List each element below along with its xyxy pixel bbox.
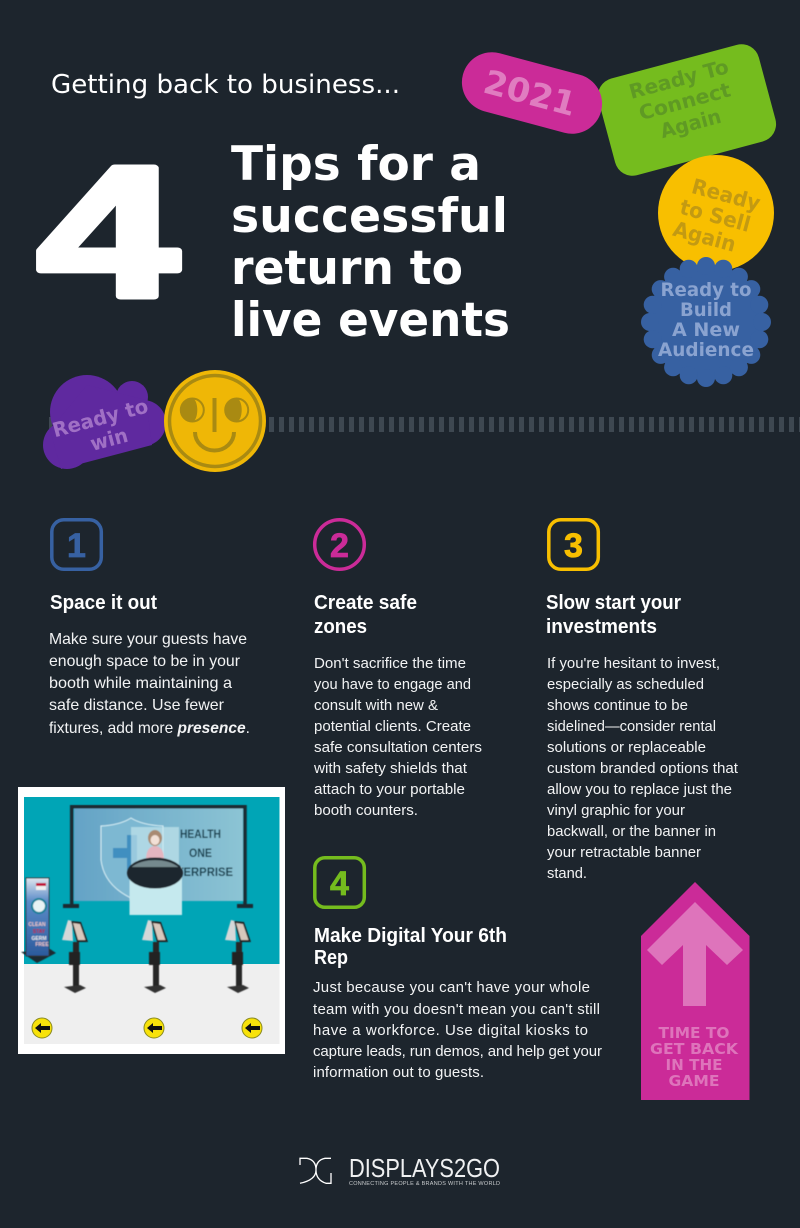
backwall banner: ONE	[189, 846, 212, 860]
body: tip 2: with safety shields that	[313, 760, 468, 777]
icon: smiley coin	[164, 370, 266, 472]
body: tip 4	[313, 979, 602, 1081]
icon: number 1	[52, 520, 101, 569]
body: tip 3: shows continue to be	[547, 697, 688, 714]
tip 1: Space it out	[49, 520, 250, 737]
retractable tower banner: CLEAN	[28, 922, 46, 928]
badge: Ready to Sell Again: Ready	[689, 174, 763, 216]
body: tip 2: booth counters.	[314, 802, 418, 819]
heading: Create safe zones	[314, 592, 417, 638]
badge: Ready To Connect Again: Connect	[636, 77, 734, 125]
badge: Ready to Build A New Audience: A New	[672, 319, 740, 341]
kiosk 3	[225, 920, 251, 993]
retractable tower banner: STAY	[33, 929, 46, 935]
sign text: TIME TO	[658, 1024, 730, 1042]
body: tip 3: allow you to replace just the	[547, 781, 732, 798]
dashed divider	[49, 417, 800, 432]
badge: 2021	[455, 46, 609, 140]
tip 2: Create safe zones	[313, 520, 482, 819]
tip 4: Make Digital Your 6th Rep	[313, 858, 602, 1081]
badge: Ready to Build A New Audience	[641, 257, 771, 387]
body: tip 1: fixtures, add more presence.	[49, 720, 250, 737]
body: tip 2: safe consultation centers	[314, 739, 482, 756]
floor arrow 2	[144, 1018, 164, 1038]
body: tip 3: custom branded options that	[547, 760, 739, 777]
icon: number 1: 1	[67, 527, 86, 565]
heading: Create safe zones: Create safe	[314, 592, 417, 614]
body: tip 2: Don't sacrifice the time	[314, 655, 466, 672]
body: tip 3: sidelined—consider rental	[547, 718, 716, 735]
kicker: Getting back to business: Getting back to business...	[51, 70, 400, 100]
body: tip 3: If you're hesitant to invest,	[547, 655, 720, 672]
body: tip 3: especially as scheduled	[547, 676, 704, 693]
icon: up arrow	[647, 902, 743, 1006]
badge: 2021: 2021	[479, 62, 580, 124]
retractable tower banner: GERM	[32, 936, 46, 942]
heading: Slow start your investments	[546, 592, 681, 638]
badge: Ready to Sell Again	[658, 155, 774, 271]
title: successful	[231, 189, 508, 244]
badge: Ready to Build A New Audience: Build	[680, 299, 732, 321]
body: tip 2: attach to your portable	[314, 781, 465, 798]
body: tip 4: have a workforce. Use digital kiosks to	[313, 1022, 588, 1039]
sign text: GAME	[668, 1072, 720, 1090]
body: tip 2: potential clients. Create	[314, 718, 471, 735]
tagline: CONNECTING PEOPLE & BRANDS WITH THE WORLD	[349, 1181, 500, 1187]
sign text	[650, 1024, 739, 1090]
icon: number 3: 3	[564, 527, 583, 565]
heading: Make Digital Your 6th Rep: Rep	[314, 947, 348, 969]
body: tip 2: you have to engage and	[314, 676, 471, 693]
badge: Ready To Connect Again	[594, 40, 780, 180]
heading: Space it out: Space it out	[50, 592, 157, 614]
badge: Ready to win cloud: Ready to	[50, 394, 151, 442]
floor arrow 3	[242, 1018, 262, 1038]
big numeral 4: 4	[37, 128, 179, 336]
body: tip 2: consult with new &	[314, 697, 438, 714]
badge: Ready to win cloud	[43, 375, 166, 469]
title	[231, 137, 510, 348]
badge: Ready to Build A New Audience: Ready to	[660, 279, 752, 301]
retractable tower banner	[21, 878, 56, 963]
body: tip 1: safe distance. Use fewer	[49, 697, 225, 714]
tip 3: Slow start your investments	[546, 520, 739, 882]
body: tip 1	[49, 631, 250, 737]
safety shield counter	[127, 827, 183, 915]
badge: Ready to win cloud: win	[88, 423, 131, 456]
body: tip 3: solutions or replaceable	[547, 739, 706, 756]
badge: Ready to Sell Again: Again	[670, 217, 738, 257]
heading: Slow start your investments: Slow start your	[546, 592, 681, 614]
body: tip 3: backwall, or the banner in	[547, 823, 716, 840]
body: tip 3: vinyl graphic for your	[547, 802, 685, 819]
wordmark: DISPLAYS2GO	[349, 1153, 500, 1183]
icon: number 2: 2	[330, 527, 349, 565]
body: tip 2	[313, 655, 482, 819]
badge: Ready To Connect Again: Again	[658, 104, 724, 143]
icon: number 4: 4	[330, 865, 349, 903]
backwall banner	[63, 807, 253, 908]
booth illustration	[18, 787, 285, 1054]
badge: Ready to Build A New Audience: Audience	[658, 339, 754, 361]
sign: Time to get back in the game	[641, 882, 750, 1100]
backwall banner: ENTERPRISE	[161, 865, 233, 879]
heading: Slow start your investments: investments	[546, 616, 657, 638]
backwall banner: HEALTH	[180, 827, 221, 841]
body: tip 3: your retractable banner	[547, 844, 701, 861]
body: tip 3	[547, 655, 739, 882]
title: return to	[231, 241, 463, 296]
title: Tips for a	[231, 137, 481, 192]
body: tip 4: capture leads, run demos, and help get your	[313, 1043, 602, 1060]
title: live events	[231, 293, 510, 348]
floor arrow 1	[32, 1018, 52, 1038]
sign text: IN THE	[666, 1056, 722, 1074]
icon: DG mark	[300, 1158, 331, 1183]
kiosk 1	[62, 920, 88, 993]
logo: Displays2Go	[300, 1153, 500, 1187]
kiosk 2	[142, 920, 168, 993]
icon: number 4	[315, 858, 364, 907]
body: tip 1: booth while maintaining a	[49, 675, 232, 692]
body: tip 4: information out to guests.	[313, 1064, 484, 1081]
heading: Make Digital Your 6th Rep: Make Digital Your 6th	[314, 925, 507, 947]
sign text: GET BACK	[650, 1040, 739, 1058]
retractable tower banner: FREE	[35, 942, 49, 948]
icon: number 2	[315, 520, 364, 569]
badge: Ready To Connect Again: Ready To	[626, 54, 731, 104]
icon: number 3	[549, 520, 598, 569]
body: tip 4: team with you doesn't mean you can't still	[313, 1001, 600, 1018]
heading: Make Digital Your 6th Rep	[314, 925, 507, 969]
body: tip 1: enough space to be in your	[49, 653, 241, 670]
body: tip 1: Make sure your guests have	[49, 631, 247, 648]
body: tip 3: stand.	[547, 865, 587, 882]
body: tip 4: Just because you can't have your whole	[313, 979, 590, 996]
badge: Ready to Sell Again: to Sell	[677, 195, 753, 237]
heading: Create safe zones: zones	[314, 616, 367, 638]
